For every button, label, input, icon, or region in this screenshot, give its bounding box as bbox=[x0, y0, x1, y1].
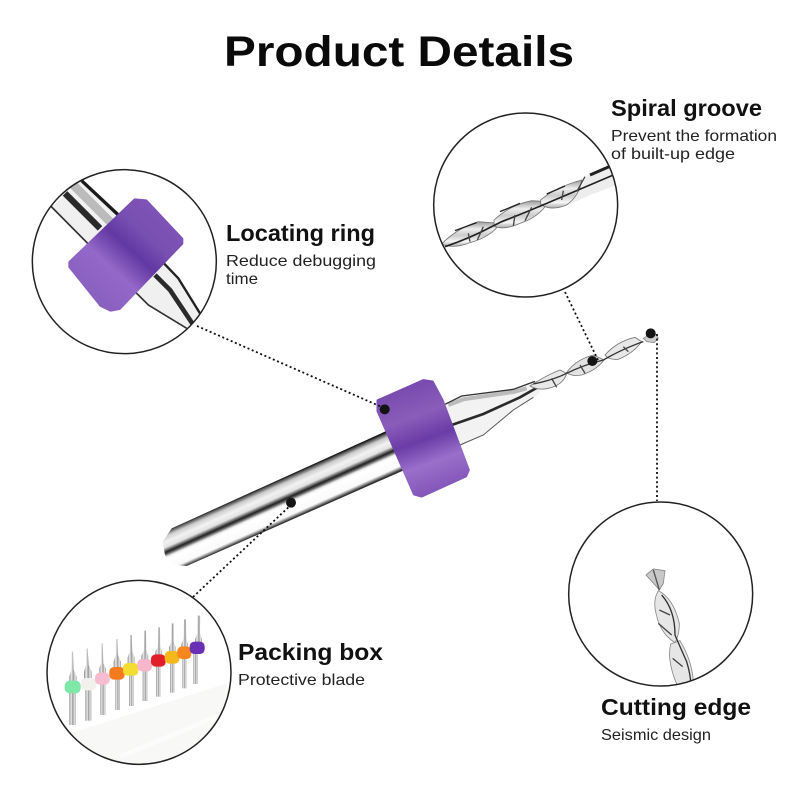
label: spiral groove: Prevent the formation bbox=[611, 128, 777, 145]
drill shanks bbox=[69, 647, 198, 725]
dotted leader: locating ring bbox=[197, 326, 384, 408]
dotted leader: cutting edge bbox=[656, 334, 658, 501]
label: packing box: Packing box bbox=[238, 639, 383, 665]
drill tips bbox=[69, 616, 202, 685]
title: Product Details bbox=[224, 28, 574, 76]
label: locating ring: Reduce debugging bbox=[226, 253, 376, 270]
purple locating ring bbox=[378, 381, 468, 496]
label: locating ring: Locating ring bbox=[226, 220, 375, 246]
label: spiral groove: of built-up edge bbox=[611, 146, 735, 163]
label: packing box: Protective blade bbox=[238, 672, 365, 689]
clear box bbox=[70, 683, 233, 770]
drill taper bbox=[443, 381, 540, 445]
zoomed cutting tip bbox=[646, 569, 693, 687]
coloured rings bbox=[65, 642, 205, 693]
clear box and ten coloured drill bits bbox=[64, 616, 205, 725]
zoomed spiral flutes bbox=[442, 165, 617, 247]
label: locating ring: time bbox=[226, 271, 258, 288]
panel: packing box circle bbox=[47, 580, 233, 770]
panel: locating ring circle bbox=[32, 170, 216, 354]
panel: spiral groove circle bbox=[434, 113, 618, 297]
label: spiral groove: Spiral groove bbox=[611, 95, 762, 121]
spiral flutes bbox=[530, 332, 658, 389]
label: cutting edge: Seismic design bbox=[601, 727, 711, 744]
label: spiral groove bbox=[611, 95, 777, 163]
label: locating ring bbox=[226, 220, 376, 288]
panel: cutting edge circle bbox=[569, 502, 753, 687]
label: cutting edge: Cutting edge bbox=[601, 694, 751, 720]
label: cutting edge bbox=[601, 694, 751, 744]
dotted leader: spiral groove bbox=[565, 292, 598, 360]
label: packing box bbox=[238, 639, 383, 689]
drill shank bbox=[163, 398, 465, 566]
zoomed ring and shank bbox=[51, 181, 200, 328]
dotted leader: packing box bbox=[193, 503, 293, 597]
callout dots bbox=[286, 328, 656, 508]
main drill bit illustration bbox=[163, 332, 658, 566]
